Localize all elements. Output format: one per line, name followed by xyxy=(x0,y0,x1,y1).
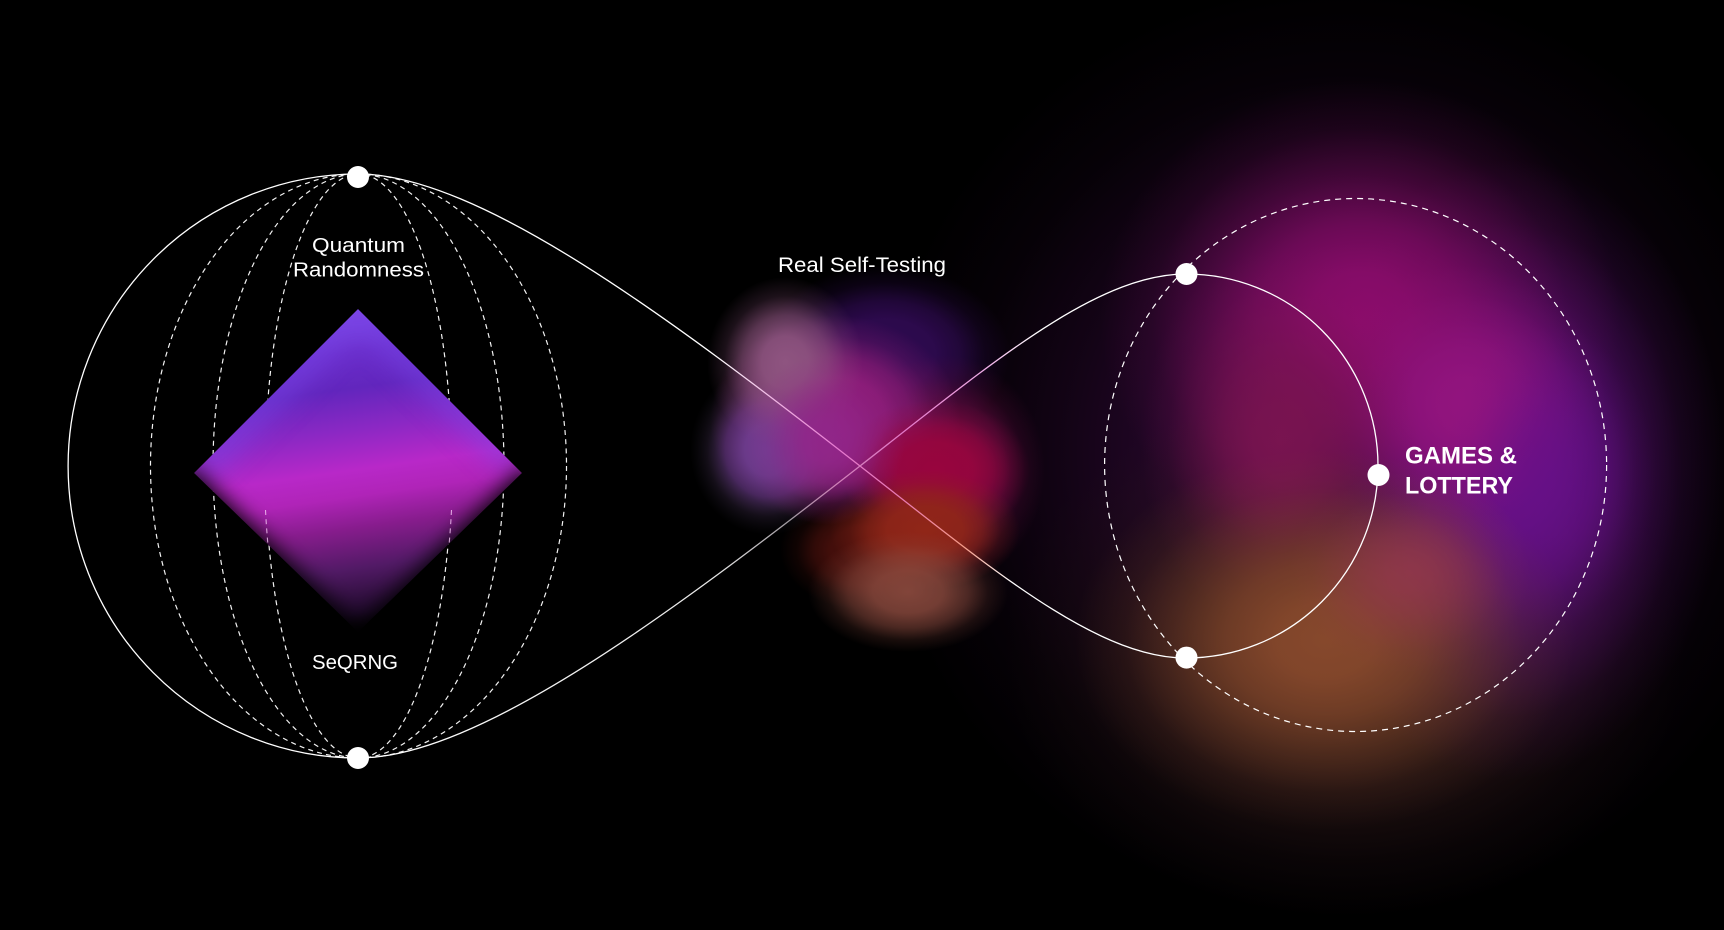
node: lower right xyxy=(1176,647,1198,669)
dashed meridians of the quantum sphere xyxy=(150,174,566,758)
left arc of the loop xyxy=(68,174,358,758)
label: Games and Lottery xyxy=(1405,442,1517,500)
node: top of sphere xyxy=(347,166,369,188)
label: Quantum Randomness: Quantum xyxy=(312,234,405,257)
node: games and lottery xyxy=(1368,464,1390,486)
dashed outer ellipse xyxy=(1105,198,1607,732)
label: Games and Lottery: LOTTERY xyxy=(1405,472,1513,500)
label: SeQRNG: SeQRNG xyxy=(312,651,398,674)
node: bottom of sphere xyxy=(347,747,369,769)
diamond: quantum core xyxy=(194,309,522,624)
central gradient blob xyxy=(690,265,1045,652)
right arc of the loop xyxy=(1186,274,1378,658)
right gradient glow xyxy=(875,0,1724,920)
label: Games and Lottery: GAMES & xyxy=(1405,442,1517,470)
infinity curve: bottom left to top right xyxy=(358,274,1186,758)
node: upper right xyxy=(1176,263,1198,285)
faint dashed lines over the fading lower diamond xyxy=(265,510,452,543)
label: Real Self-Testing: Real Self-Testing xyxy=(778,254,946,277)
label: Quantum Randomness: Randomness xyxy=(293,258,424,282)
label: Quantum Randomness xyxy=(293,234,424,282)
infinity curve: top left to bottom right xyxy=(358,174,1186,658)
